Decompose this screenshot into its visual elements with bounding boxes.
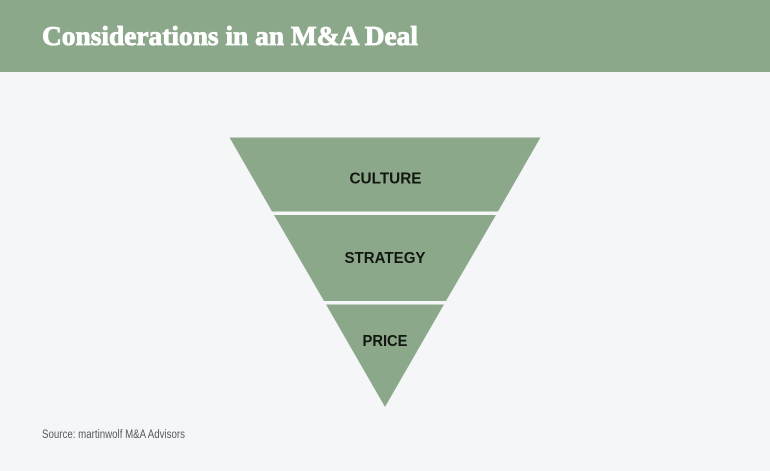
title: Considerations in an M&A Deal — [42, 21, 418, 51]
tier: culture: CULTURE — [350, 170, 422, 188]
tier: culture — [230, 138, 540, 212]
tier: price — [326, 304, 444, 407]
tier: price: PRICE — [362, 333, 408, 350]
header band — [0, 0, 770, 72]
tier: strategy: STRATEGY — [344, 250, 426, 267]
source note: Source: martinwolf M&A Advisors — [42, 429, 185, 441]
tier: strategy — [274, 215, 496, 301]
inverted pyramid chart — [230, 138, 540, 407]
